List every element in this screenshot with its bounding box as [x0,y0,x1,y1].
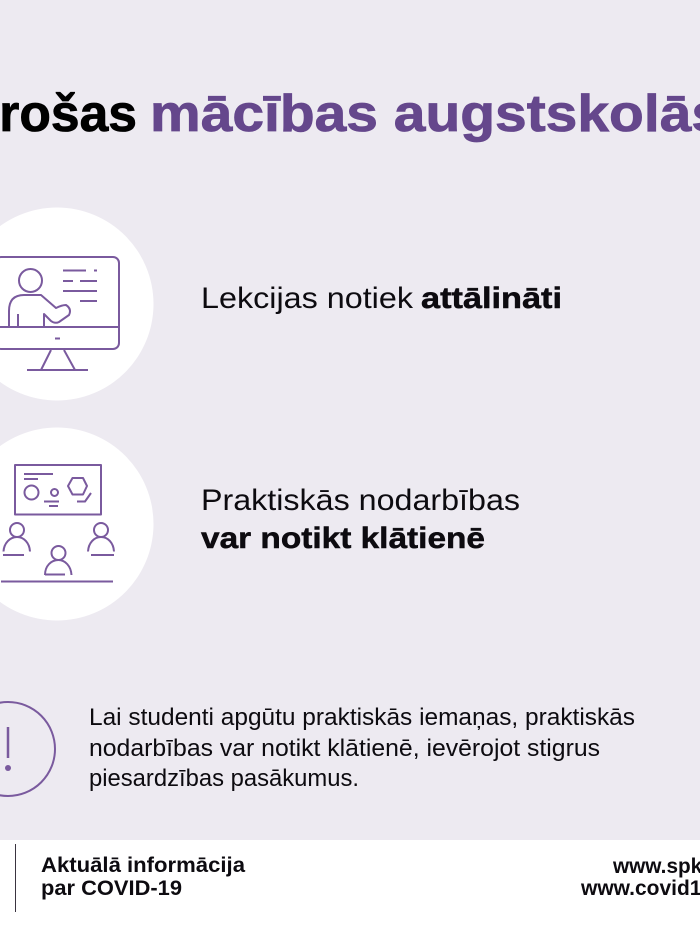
text: lectures: attālināti [421,282,562,315]
text: note: piesardzības pasākumus. [89,765,359,792]
text: practical classes: Praktiskās nodarbības [201,484,520,517]
text: lectures [201,282,562,315]
panel: practical classes [0,428,520,620]
icon: monitor with lecturer [0,208,154,400]
footer [0,840,700,933]
footer text: websites [580,855,700,900]
text: practical classes: var notikt klātienē [201,522,485,555]
icon: exclamation mark [0,702,55,796]
title: mācības augstskolās [150,85,700,143]
callout: safety note [0,702,635,796]
footer text: COVID information [41,854,245,900]
text: note [89,704,635,792]
footer text: COVID information: par COVID-19 [41,877,182,900]
panel: remote lectures [0,208,562,400]
footer text: COVID information: Aktuālā informācija [41,854,245,877]
text: lectures: Lekcijas notiek [201,282,414,315]
icon: classroom [0,428,154,620]
text: note: Lai studenti apgūtu praktiskās iemaņas, praktiskās [89,704,635,731]
text: note: nodarbības var notikt klātienē, ievērojot stigrus [89,735,600,762]
text: practical classes [201,484,520,555]
